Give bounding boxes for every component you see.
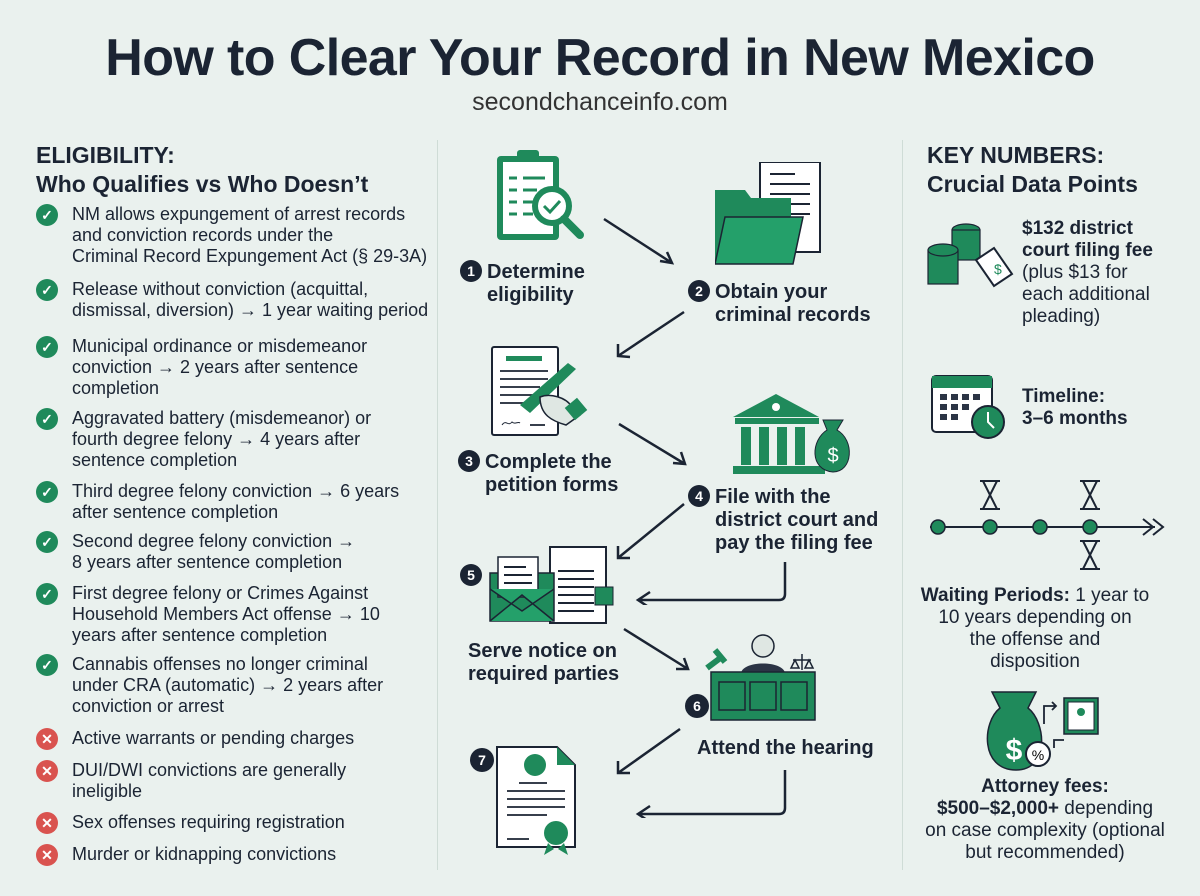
list: eligibility items: Second degree felony conviction →	[72, 531, 355, 551]
key numbers heading: Crucial Data Points	[927, 171, 1138, 197]
step 7	[470, 748, 494, 772]
list: eligibility items: Aggravated battery (misdemeanor) or	[72, 408, 371, 428]
stat: timeline: Timeline:	[1022, 386, 1105, 407]
stat: attorney fees: Attorney fees:	[981, 776, 1109, 797]
step 5	[460, 564, 482, 586]
panel: process steps: Attend the hearing	[697, 737, 874, 759]
icon: coins tag: $	[994, 261, 1002, 277]
list: eligibility items: Municipal ordinance or misdemeanor	[72, 336, 367, 356]
list: eligibility items: ✓	[41, 411, 53, 427]
stat: timeline: 3–6 months	[1022, 408, 1128, 429]
icon: judge bench	[705, 634, 816, 721]
panel: process steps: Serve notice on	[468, 640, 617, 662]
list: eligibility items: 8 years after sentence completion	[72, 552, 342, 572]
list: eligibility items: sentence completion	[72, 450, 237, 470]
list: eligibility items: Active warrants or pending charges	[72, 728, 354, 748]
icon: certificate	[496, 746, 576, 855]
panel: eligibility	[36, 142, 368, 197]
step 2: criminal records	[715, 304, 871, 326]
step 6	[685, 694, 709, 718]
eligibility heading: Who Qualifies vs Who Doesn’t	[36, 171, 368, 197]
icon: clipboard search	[497, 150, 584, 240]
step 3: 3	[465, 453, 473, 469]
step 2: 2	[695, 283, 703, 299]
stat: filing fee: (plus $13 for	[1022, 262, 1128, 283]
list: eligibility items: and conviction records under the	[72, 225, 333, 245]
list: eligibility items: ✓	[41, 207, 53, 223]
list: eligibility items: conviction or arrest	[72, 696, 224, 716]
stat: attorney fees: on case complexity (optional	[925, 820, 1165, 841]
stat: filing fee: pleading)	[1022, 306, 1100, 327]
step 6: 6	[693, 698, 701, 714]
step 2	[688, 280, 871, 326]
step 7: 7	[478, 752, 486, 768]
list: eligibility items: conviction → 2 years after sentence	[72, 357, 358, 377]
list: eligibility items: ✓	[41, 534, 53, 550]
list: eligibility items: after sentence completion	[72, 502, 278, 522]
list: eligibility items: ✓	[41, 484, 53, 500]
list: eligibility items: ineligible	[72, 781, 142, 801]
list: eligibility items: under CRA (automatic) → 2 years after	[72, 675, 383, 695]
subtitle: secondchanceinfo.com	[472, 88, 728, 116]
stat: waiting periods: 10 years depending on	[938, 607, 1132, 628]
panel: key numbers	[920, 142, 1165, 863]
arrow 5-6	[623, 628, 690, 670]
step 3: petition forms	[485, 474, 618, 496]
stat: attorney fees: but recommended)	[965, 842, 1125, 863]
icon: petition form	[491, 346, 588, 436]
step 1: eligibility	[487, 284, 574, 306]
step 1	[460, 260, 585, 306]
stat: waiting periods	[920, 585, 1149, 672]
icon: coins tag	[927, 223, 1014, 288]
key numbers heading: KEY NUMBERS:	[927, 142, 1104, 168]
icon: money bag: %	[1032, 747, 1044, 763]
list: eligibility items: Sex offenses requiring registration	[72, 812, 345, 832]
step 4: pay the filing fee	[715, 532, 873, 554]
step 3: Complete the	[485, 451, 612, 473]
icon: envelope	[489, 546, 614, 624]
step 5: 5	[467, 567, 475, 583]
arrow 1-2	[603, 218, 674, 265]
step 4: 4	[695, 488, 703, 504]
list: eligibility items: First degree felony or Crimes Against	[72, 583, 368, 603]
icon: waiting timeline	[930, 480, 1164, 570]
list: eligibility items: Third degree felony conviction → 6 years	[72, 481, 399, 501]
list: eligibility items: ✕	[41, 763, 53, 779]
stat: filing fee: each additional	[1022, 284, 1150, 305]
stat: filing fee: court filing fee	[1022, 240, 1153, 261]
key numbers heading	[927, 142, 1138, 197]
icon: money bag	[986, 691, 1099, 771]
icon: courthouse money: $	[827, 445, 839, 467]
list: eligibility items: Criminal Record Expungement Act (§ 29-3A)	[72, 246, 427, 266]
panel: process steps: required parties	[468, 663, 619, 685]
list: eligibility items: completion	[72, 378, 159, 398]
list: eligibility items: dismissal, diversion) → 1 year waiting period	[72, 300, 428, 320]
title: How to Clear Your Record in New Mexico	[105, 29, 1095, 87]
list: eligibility items: DUI/DWI convictions are generally	[72, 760, 346, 780]
arrow 3-4	[618, 422, 687, 466]
icon: courthouse money	[733, 394, 850, 474]
arrow 6-7	[616, 728, 681, 774]
stat: waiting periods: Waiting Periods: 1 year to	[921, 585, 1149, 606]
arrow return 6-7	[636, 770, 786, 818]
icon: calendar clock	[931, 375, 1005, 439]
stat: attorney fees	[925, 776, 1165, 863]
step 3	[458, 450, 618, 496]
step 1: 1	[467, 263, 475, 279]
stat: filing fee: $132 district	[1022, 218, 1133, 239]
list: eligibility items: fourth degree felony → 4 years after	[72, 429, 360, 449]
icon: folder	[715, 162, 821, 265]
list: eligibility items: ✕	[41, 847, 53, 863]
list: eligibility items: Household Members Act offense → 10	[72, 604, 380, 624]
step 2: Obtain your	[715, 281, 827, 303]
list: eligibility items: Release without conviction (acquittal,	[72, 279, 368, 299]
list: eligibility items	[36, 204, 428, 866]
list: eligibility items: ✕	[41, 731, 53, 747]
icon: money bag: $	[1006, 734, 1023, 767]
list: eligibility items: years after sentence completion	[72, 625, 327, 645]
eligibility heading: ELIGIBILITY:	[36, 142, 175, 168]
list: eligibility items: ✓	[41, 282, 53, 298]
step 4	[688, 485, 878, 554]
list: eligibility items: ✓	[41, 586, 53, 602]
stat: timeline	[1022, 386, 1128, 429]
list: eligibility items: ✓	[41, 657, 53, 673]
list: eligibility items: NM allows expungement of arrest records	[72, 204, 405, 224]
stat: waiting periods: the offense and	[970, 629, 1100, 650]
step 4: district court and	[715, 509, 878, 531]
list: eligibility items: ✓	[41, 339, 53, 355]
stat: filing fee	[1022, 218, 1153, 327]
arrow 2-3	[616, 311, 685, 358]
stat: waiting periods: disposition	[990, 651, 1080, 672]
arrow 4-5	[616, 503, 685, 560]
step 4: File with the	[715, 486, 831, 508]
eligibility heading	[36, 142, 368, 197]
stat: attorney fees: $500–$2,000+ depending	[937, 798, 1153, 819]
list: eligibility items: Cannabis offenses no longer criminal	[72, 654, 368, 674]
list: eligibility items: Murder or kidnapping convictions	[72, 844, 336, 864]
panel: process steps	[458, 150, 878, 855]
list: eligibility items: ✕	[41, 815, 53, 831]
step 1: Determine	[487, 261, 585, 283]
arrow return 4-5	[636, 562, 786, 605]
